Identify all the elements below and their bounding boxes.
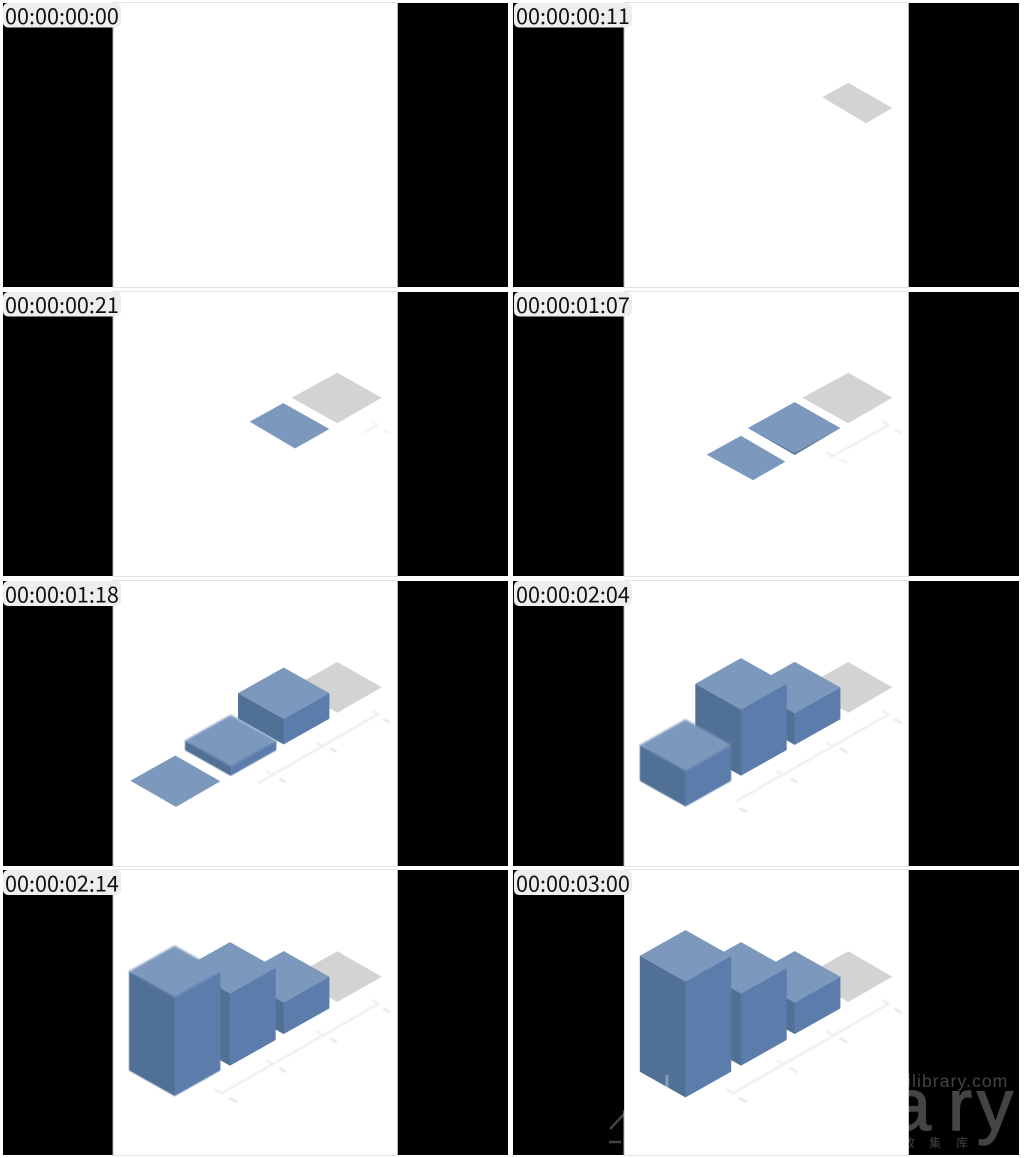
bar: front rising [640, 720, 731, 806]
frame 5: 00:00:01:18: 00:00:01:18 [5, 578, 119, 610]
grey base tile [802, 373, 892, 423]
axis labels [739, 719, 902, 812]
frame 7: 00:00:02:14: 00:00:02:14 [5, 868, 119, 898]
frame 5: 00:00:01:18 [3, 578, 508, 866]
bar: middle rising [185, 715, 276, 776]
bar: middle [184, 942, 276, 1066]
axis labels [279, 719, 390, 783]
watermark: partial site name on black bars: 收集库 [903, 1135, 968, 1150]
frame 2: 00:00:00:11 [513, 0, 1019, 288]
grey base tile [292, 662, 382, 713]
bar: front rising [129, 946, 220, 1096]
frame 1: 00:00:00:00 [3, 0, 508, 288]
watermark: partial site name on black bars: ilibrary.com [907, 1071, 1008, 1091]
axis [726, 1000, 889, 1093]
frame 4: 00:00:01:07 [513, 289, 1019, 576]
axis labels [739, 1008, 902, 1102]
frame 8: 00:00:03:00: 00:00:03:00 [516, 868, 630, 898]
watermark: partial site name on black bars: ary [891, 1066, 1013, 1146]
watermark stroke over bar [666, 1075, 668, 1090]
watermark: partial site name on black bars [513, 870, 1019, 1155]
blue tile [131, 756, 220, 807]
axis fragment [363, 421, 391, 433]
frame 4: 00:00:01:07: 00:00:01:07 [516, 289, 630, 320]
axis [737, 711, 889, 801]
bar: front tallest [640, 930, 731, 1097]
axis [826, 421, 902, 463]
rising bar [748, 402, 840, 455]
blue tile [250, 403, 329, 448]
grey base tile [292, 373, 382, 423]
frame 1: 00:00:00:00: 00:00:00:00 [5, 0, 119, 31]
grey base tile [803, 662, 892, 713]
frame 8: 00:00:03:00 [513, 868, 908, 1156]
bar: middle [696, 658, 786, 776]
bar: back [749, 951, 840, 1034]
frame 6: 00:00:02:04 [513, 578, 1019, 866]
bar: back [238, 951, 329, 1034]
frame 6: 00:00:02:04: 00:00:02:04 [516, 578, 630, 610]
axis [214, 1000, 379, 1093]
axis labels [229, 1008, 390, 1102]
bar: middle [696, 942, 786, 1066]
frame 2: 00:00:00:11: 00:00:00:11 [516, 0, 630, 31]
frame 7: 00:00:02:14 [3, 868, 508, 1156]
grey base tile [822, 83, 892, 123]
blue tile [707, 436, 785, 480]
frame 3: 00:00:00:21 [3, 289, 508, 576]
bar: back [238, 668, 329, 744]
frame 3: 00:00:00:21: 00:00:00:21 [5, 289, 119, 320]
bar: back [749, 662, 840, 745]
grey base tile [292, 951, 382, 1002]
axis [258, 711, 379, 783]
grey base tile [803, 951, 892, 1002]
